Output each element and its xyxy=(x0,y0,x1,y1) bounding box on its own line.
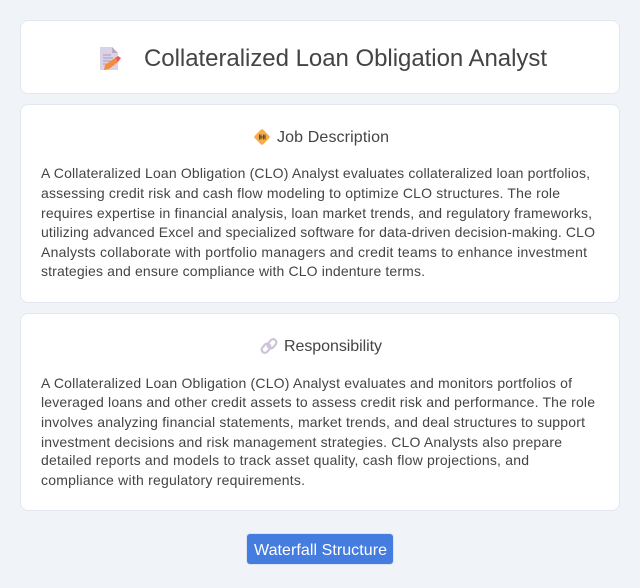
job description text: A Collateralized Loan Obligation (CLO) Analyst evaluates collateralized loan portfolios, xyxy=(41,165,590,181)
panel: responsibility xyxy=(20,313,620,511)
responsibility text: compliance with regulatory requirements. xyxy=(41,472,305,488)
responsibility text: A Collateralized Loan Obligation (CLO) Analyst evaluates and monitors portfolios of xyxy=(41,375,572,391)
heading: responsibility: Responsibility xyxy=(284,338,382,355)
responsibility text: leveraged loans and other credit assets to assess credit risk and performance. The role xyxy=(41,394,595,410)
responsibility text: involves analyzing financial statements, market trends, and deal structures to support xyxy=(41,414,585,430)
job description text: assessing credit risk and cash flow modeling to optimize CLO structures. The role xyxy=(41,185,560,201)
job description text: strategies and ensure compliance with CLO indenture terms. xyxy=(41,263,425,279)
title: Collateralized Loan Obligation Analyst xyxy=(144,45,547,72)
job description text: utilizing advanced Excel and specialized software for data-driven decision-making. CLO xyxy=(41,224,595,240)
responsibility text: investment decisions and risk management strategies. CLO Analysts also prepare xyxy=(41,434,562,450)
heading: job description: Job Description xyxy=(277,129,389,146)
job description text: requires expertise in financial analysis, loan market trends, and regulatory frameworks, xyxy=(41,205,592,221)
icon: document with pencil xyxy=(100,47,121,70)
panel: title header xyxy=(20,20,620,94)
icon: chain link xyxy=(260,338,278,354)
icon: orange diamond sign xyxy=(254,129,270,145)
job description text xyxy=(41,165,595,279)
job description text: Analysts collaborate with portfolio managers and credit teams to enhance investment xyxy=(41,244,587,260)
panel: job description xyxy=(20,104,620,303)
button: waterfall structure: Waterfall Structure xyxy=(254,542,387,559)
button: waterfall structure xyxy=(247,534,393,564)
responsibility text: detailed reports and models to track asset quality, cash flow projections, and xyxy=(41,452,529,468)
